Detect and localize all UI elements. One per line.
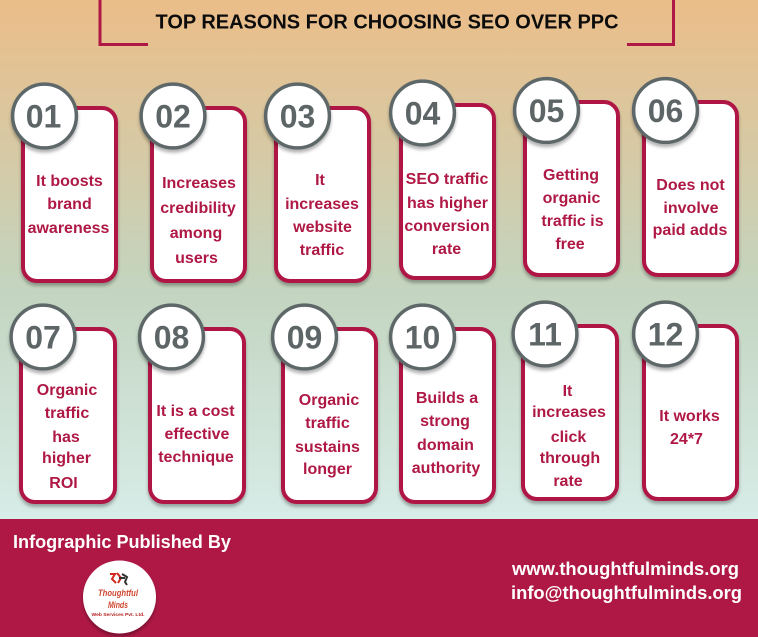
email address: info@thoughtfulminds.org — [511, 583, 742, 603]
card 09 — [273, 305, 376, 502]
number badge: 02 — [155, 98, 191, 134]
number badge — [513, 302, 577, 366]
reason text: through — [540, 450, 600, 467]
footer band — [0, 519, 758, 637]
reason text — [404, 171, 490, 258]
number badge — [141, 84, 205, 148]
reason text: Organic — [299, 392, 359, 409]
card frame — [150, 329, 244, 502]
reason text: among — [170, 225, 222, 242]
card frame — [276, 108, 369, 281]
logo wordmark: Thoughtful — [98, 588, 138, 598]
reason text: traffic is — [541, 213, 604, 230]
reason text: rate — [432, 241, 461, 258]
reason text: paid adds — [653, 222, 727, 239]
card frame — [525, 102, 618, 275]
number badge: 11 — [528, 316, 562, 352]
logo emblem — [110, 573, 127, 585]
card 10 — [391, 305, 494, 502]
publisher heading: Infographic Published By — [13, 532, 231, 552]
number badge: 03 — [280, 98, 315, 134]
website address: www.thoughtfulminds.org — [511, 559, 739, 579]
reason text: users — [175, 250, 218, 267]
reason text: conversion — [404, 218, 490, 235]
number badge: 07 — [25, 320, 61, 356]
reason text: It is a cost — [156, 403, 235, 420]
number badge: 04 — [405, 96, 440, 132]
reason text: traffic — [300, 242, 344, 259]
reason text: Builds a — [416, 390, 478, 407]
reason text — [532, 383, 606, 490]
reason text: rate — [553, 473, 583, 490]
card frame — [283, 329, 376, 502]
number badge: 10 — [405, 320, 440, 356]
reason text: Increases — [162, 175, 236, 192]
reason text: authority — [412, 460, 480, 477]
title text: TOP REASONS FOR CHOOSING SEO OVER PPC — [156, 12, 618, 34]
logo — [83, 560, 156, 634]
reason text: click — [551, 429, 586, 446]
reason text: traffic — [45, 405, 89, 422]
reason text — [412, 390, 480, 477]
number badge: 05 — [529, 93, 564, 129]
reason text: free — [555, 236, 585, 253]
reason text — [156, 403, 235, 466]
reason text: website — [292, 219, 352, 236]
card 04 — [391, 81, 494, 278]
reason text: It — [563, 383, 573, 400]
reason text — [295, 392, 360, 478]
reason text: effective — [165, 426, 230, 443]
card 11 — [513, 302, 617, 499]
reason text: SEO traffic — [406, 171, 488, 188]
footer — [0, 519, 758, 637]
reason text — [659, 408, 720, 448]
card frame — [644, 326, 737, 499]
card frame — [644, 102, 737, 275]
number badge: 12 — [648, 316, 683, 352]
card 01 — [13, 84, 116, 281]
card 02 — [141, 84, 245, 281]
number badge — [11, 305, 75, 369]
number badge: 08 — [154, 320, 189, 356]
reason text: involve — [663, 200, 719, 217]
number badge — [634, 79, 697, 142]
reason text: increases — [285, 196, 359, 213]
card frame — [401, 329, 494, 502]
reason text: It boosts — [36, 173, 103, 190]
reason text: Does not — [656, 177, 725, 194]
reason text — [37, 382, 97, 492]
number badge — [634, 302, 697, 366]
reason text: credibility — [160, 200, 236, 217]
reason text — [653, 177, 727, 239]
card frame — [152, 108, 245, 281]
title — [100, 0, 674, 44]
number badge — [13, 84, 76, 148]
card 03 — [266, 84, 369, 281]
card 08 — [140, 305, 244, 502]
reason text: has higher — [407, 195, 488, 212]
reason text — [285, 172, 359, 259]
logo wordmark second line: Minds — [108, 600, 128, 610]
reason text: longer — [303, 461, 352, 478]
card 07 — [11, 305, 115, 502]
card 06 — [634, 79, 737, 275]
number badge — [515, 79, 578, 142]
reason text — [28, 173, 110, 237]
reason text: increases — [532, 404, 606, 421]
number badge — [273, 305, 336, 369]
card frame — [21, 329, 115, 502]
number badge — [391, 305, 454, 369]
logo tagline: Web Services Pvt. Ltd. — [92, 612, 144, 617]
number badge: 01 — [26, 98, 61, 134]
reason text: sustains — [295, 439, 360, 456]
reason text: It — [315, 172, 326, 189]
card frame — [23, 108, 116, 281]
reason text — [541, 167, 604, 253]
reason text: has — [52, 429, 80, 446]
reason text: strong — [420, 413, 470, 430]
reason text: awareness — [28, 220, 110, 237]
card 12 — [634, 302, 737, 499]
title right bracket — [627, 0, 674, 44]
reason text: technique — [158, 449, 234, 466]
reason text: traffic — [305, 415, 350, 432]
reason text: ROI — [49, 475, 78, 492]
reason text: Getting — [543, 167, 599, 184]
card 05 — [515, 79, 618, 275]
card frame — [523, 326, 617, 499]
reason text: It works — [659, 408, 720, 425]
reason text: organic — [543, 190, 600, 207]
number badge — [391, 81, 454, 145]
number badge — [266, 84, 329, 148]
reason text: brand — [47, 196, 92, 213]
reason text — [160, 175, 236, 267]
number badge — [140, 305, 203, 369]
reason text: higher — [42, 450, 91, 467]
number badge: 09 — [287, 320, 322, 356]
reason text: 24*7 — [670, 431, 703, 448]
title left bracket — [100, 0, 148, 44]
number badge: 06 — [648, 93, 683, 129]
reason text: domain — [417, 437, 474, 454]
reason text: Organic — [37, 382, 97, 399]
card frame — [401, 105, 494, 278]
